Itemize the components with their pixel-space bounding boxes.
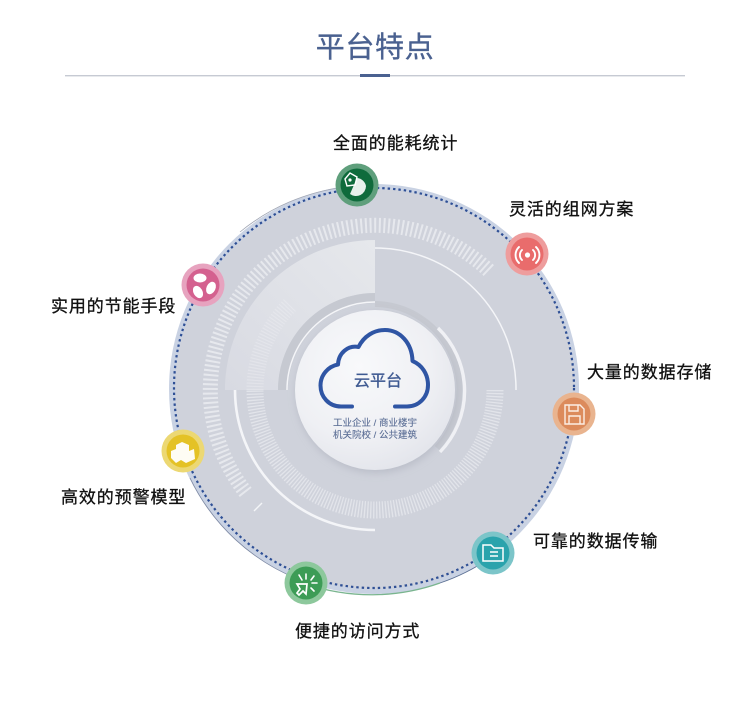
small white dash xyxy=(254,503,262,511)
circular diagram xyxy=(169,184,579,595)
icon: floppy disk xyxy=(552,392,596,436)
core description: 工业企业 / 商业楼宇 xyxy=(333,417,417,429)
icon: recycle leaves xyxy=(182,264,224,306)
icon: signal xyxy=(506,232,548,276)
light quadrant sector xyxy=(225,240,375,390)
icon: click cursor xyxy=(284,562,328,604)
core description xyxy=(333,417,417,441)
thin white arc around core xyxy=(287,302,375,390)
grey ring behind core xyxy=(283,298,375,390)
dotted orbit xyxy=(174,188,574,588)
thick white arc right of core xyxy=(438,328,465,452)
icon: folder transfer xyxy=(472,532,514,574)
label: storage: 大量的数据存储 xyxy=(587,363,712,382)
title underline xyxy=(65,74,685,77)
white arc lower left xyxy=(235,390,375,530)
core description: 机关院校 / 公共建筑 xyxy=(333,429,417,441)
label: networking: 灵活的组网方案 xyxy=(509,200,634,219)
inner tick ring xyxy=(255,390,495,510)
thin white arc upper right xyxy=(375,248,516,390)
label: warning model: 高效的预警模型 xyxy=(61,488,186,507)
icon: energy statistics xyxy=(336,164,378,206)
label: saving measures: 实用的节能手段 xyxy=(51,297,176,316)
outer disc xyxy=(169,184,579,595)
icon: cloud xyxy=(320,330,428,406)
label: access: 便捷的访问方式 xyxy=(295,622,420,641)
outer tick ring xyxy=(210,225,489,492)
icon: cubes xyxy=(162,430,204,472)
label: energy statistics: 全面的能耗统计 xyxy=(333,134,458,153)
faint ticks in sector xyxy=(255,305,290,390)
label: transmission: 可靠的数据传输 xyxy=(533,532,658,551)
core circle xyxy=(295,310,455,470)
core heading: 云平台 xyxy=(354,372,402,390)
title: 平台特点 xyxy=(316,31,434,64)
